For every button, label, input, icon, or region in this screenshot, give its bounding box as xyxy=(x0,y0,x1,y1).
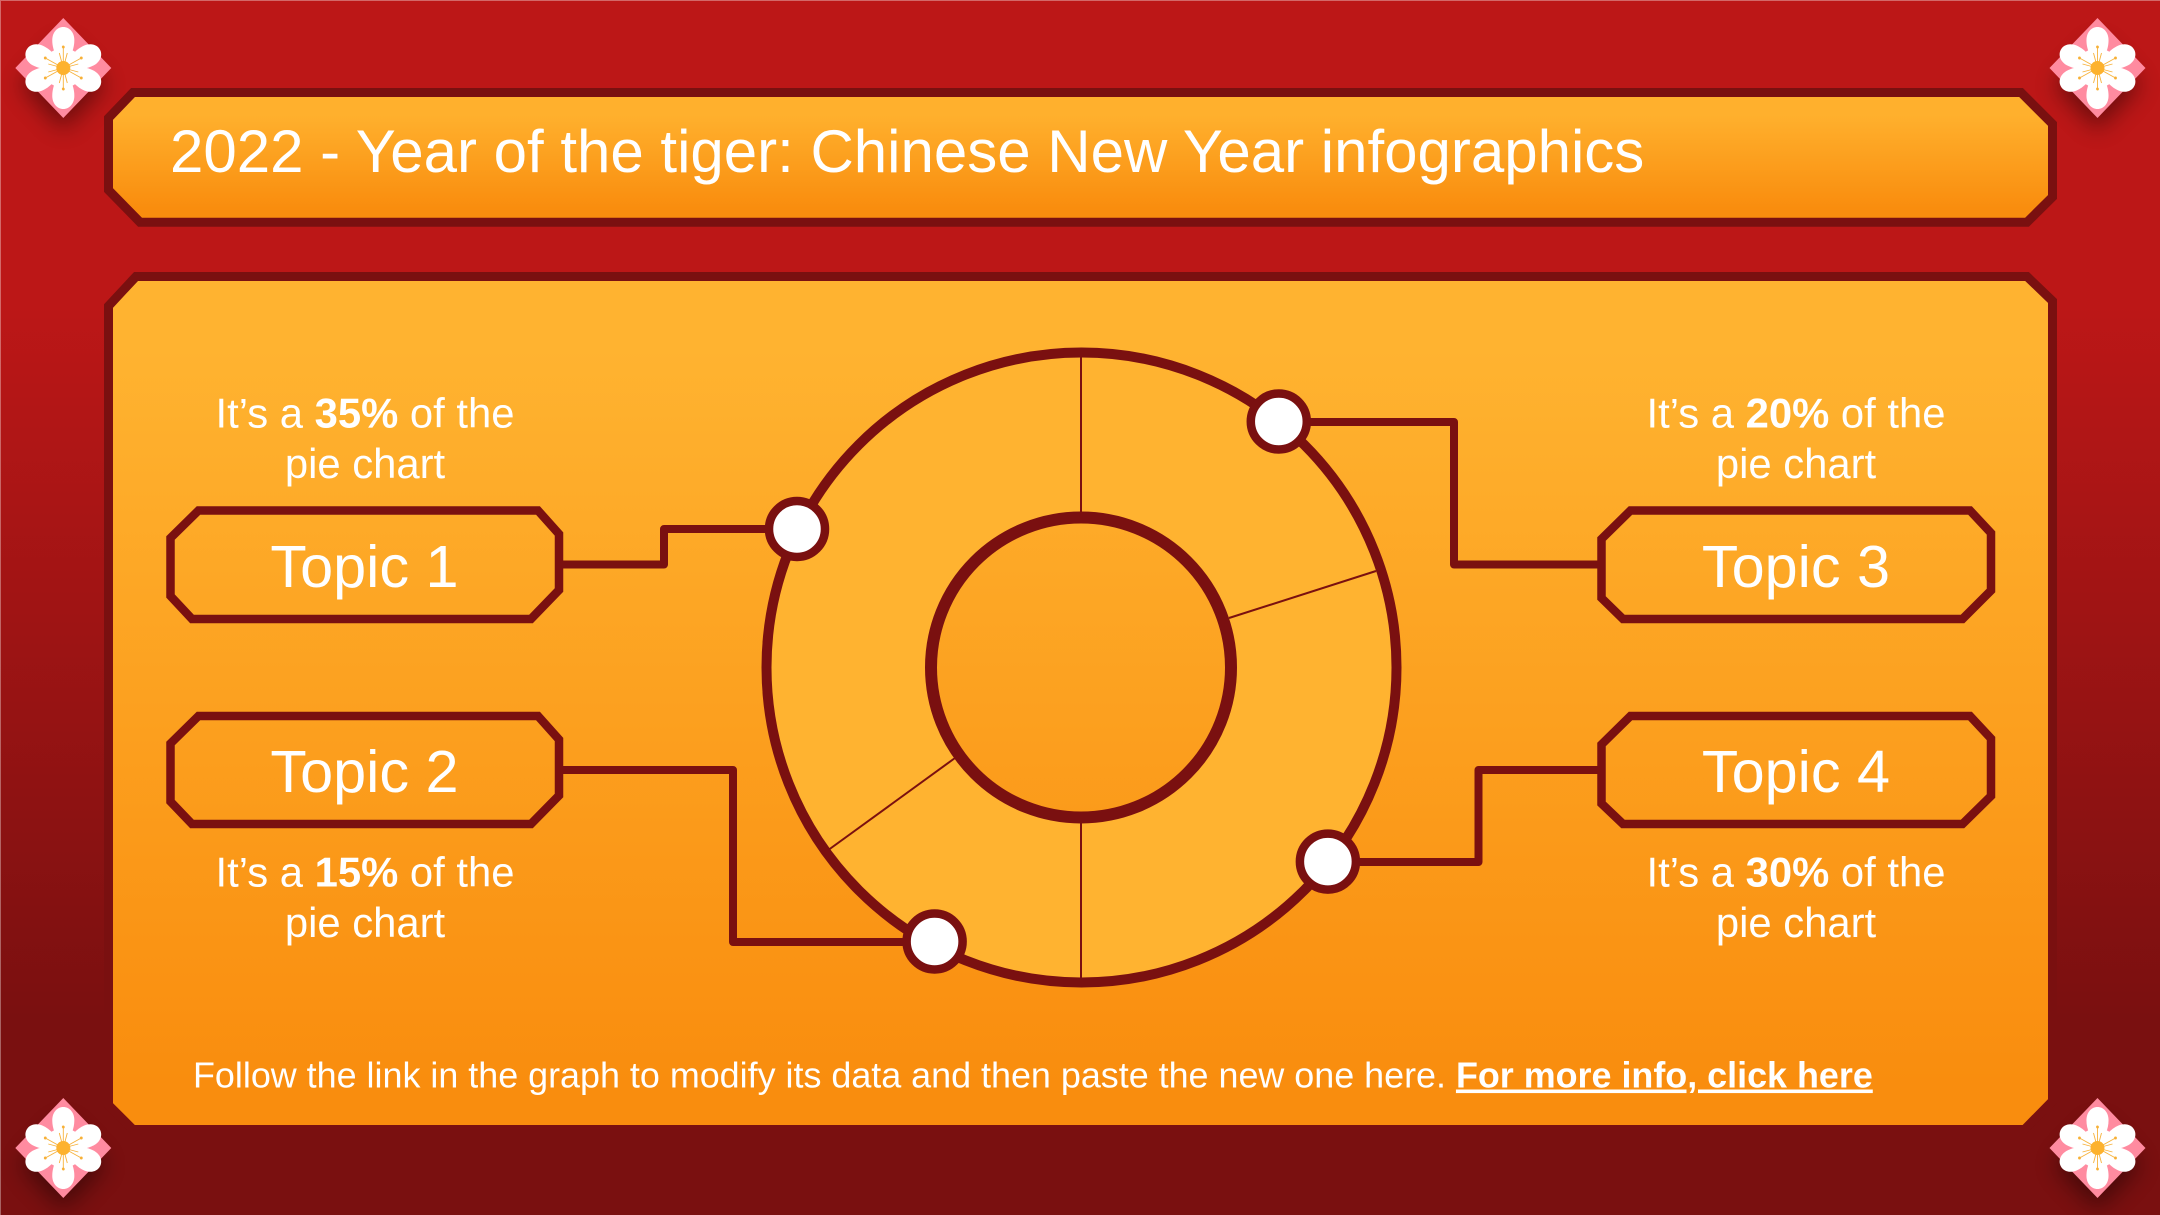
text: topic 2 percentage: It’s a 15% of the xyxy=(216,848,514,896)
marker: topic 2 xyxy=(907,914,963,970)
title: 2022 - Year of the tiger: Chinese New Year infographics xyxy=(170,118,1644,185)
text: topic 2 percentage xyxy=(216,848,514,946)
connector: topic 3 to chart xyxy=(1279,422,1601,564)
marker: topic 1 xyxy=(769,501,825,557)
chart centre hole xyxy=(931,518,1231,818)
doughnut chart xyxy=(766,352,1396,983)
topic 4 box xyxy=(1602,716,1991,824)
topic 4 box: Topic 4 xyxy=(1702,738,1890,805)
topic 2 box: Topic 2 xyxy=(270,738,459,805)
text: topic 3 percentage: It’s a 20% of the xyxy=(1647,390,1945,436)
footer note with link: Follow the link in the graph to modify its data and then paste the new one here. For more info, click here xyxy=(193,1056,1873,1096)
title banner xyxy=(108,92,2052,222)
connector: topic 1 to chart xyxy=(559,529,796,564)
topic 3 box: Topic 3 xyxy=(1702,533,1890,600)
topic 1 box: Topic 1 xyxy=(270,533,459,600)
text: topic 3 percentage xyxy=(1647,390,1945,487)
icon: flower top right xyxy=(2050,18,2146,130)
connector: topic 4 to chart xyxy=(1328,770,1601,862)
icon: flower bottom right xyxy=(2050,1098,2146,1210)
icon: flower bottom left xyxy=(15,1098,111,1210)
text: topic 3 percentage: pie chart xyxy=(1716,440,1877,487)
topic 2 box xyxy=(170,716,559,824)
text: topic 1 percentage: pie chart xyxy=(285,440,446,487)
topic 1 box xyxy=(170,510,559,619)
connector: topic 2 to chart xyxy=(559,770,934,942)
marker: topic 3 xyxy=(1251,394,1307,450)
panel: main content xyxy=(108,276,2052,1130)
icon: flower top left xyxy=(15,18,111,130)
text: topic 4 percentage: pie chart xyxy=(1716,899,1877,946)
text: topic 4 percentage: It’s a 30% of the xyxy=(1647,848,1945,896)
topic 3 box xyxy=(1602,510,1991,619)
text: topic 1 percentage xyxy=(216,390,514,487)
marker: topic 4 xyxy=(1300,834,1356,890)
text: topic 1 percentage: It’s a 35% of the xyxy=(216,390,514,436)
text: topic 2 percentage: pie chart xyxy=(285,899,446,946)
text: topic 4 percentage xyxy=(1647,848,1945,946)
